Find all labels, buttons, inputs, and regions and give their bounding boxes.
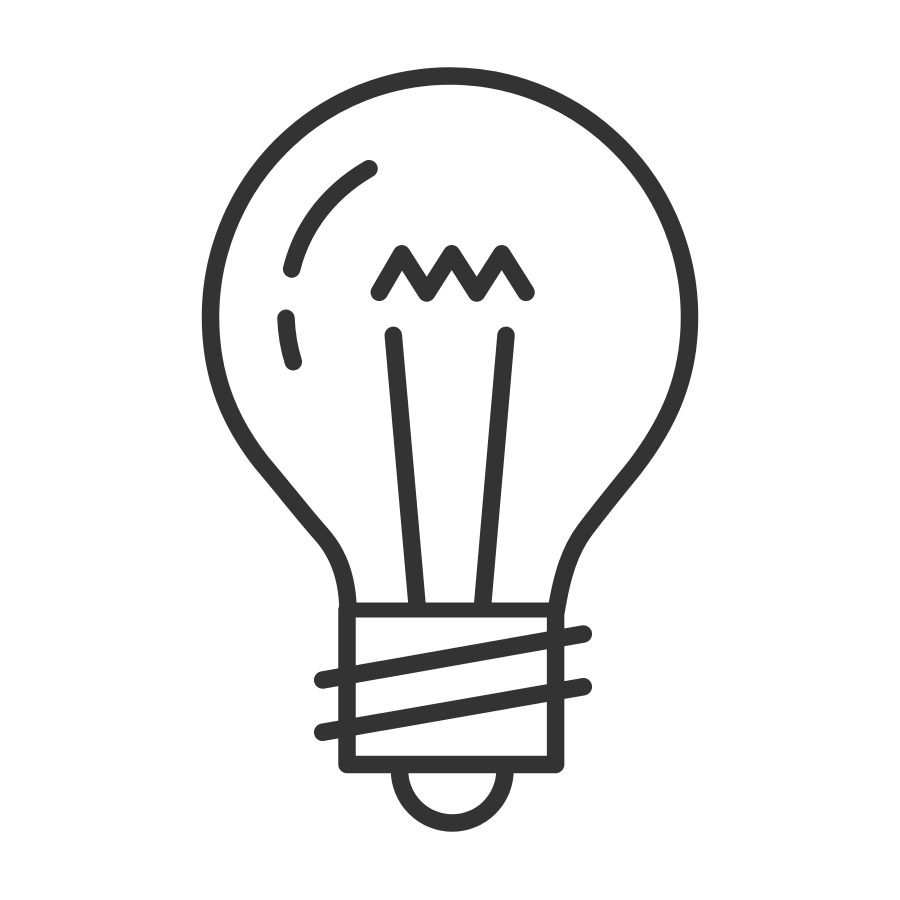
screw thread upper	[323, 634, 583, 680]
screw base top edge	[347, 602, 556, 618]
highlight arc upper	[292, 169, 369, 269]
filament zigzag	[379, 254, 526, 293]
left filament support	[393, 335, 417, 604]
bulb glass outline	[210, 76, 690, 612]
highlight arc lower	[286, 318, 293, 362]
screw thread lower	[323, 687, 583, 732]
right filament support	[483, 335, 506, 604]
screw base	[347, 610, 556, 764]
base contact tip	[400, 770, 505, 823]
